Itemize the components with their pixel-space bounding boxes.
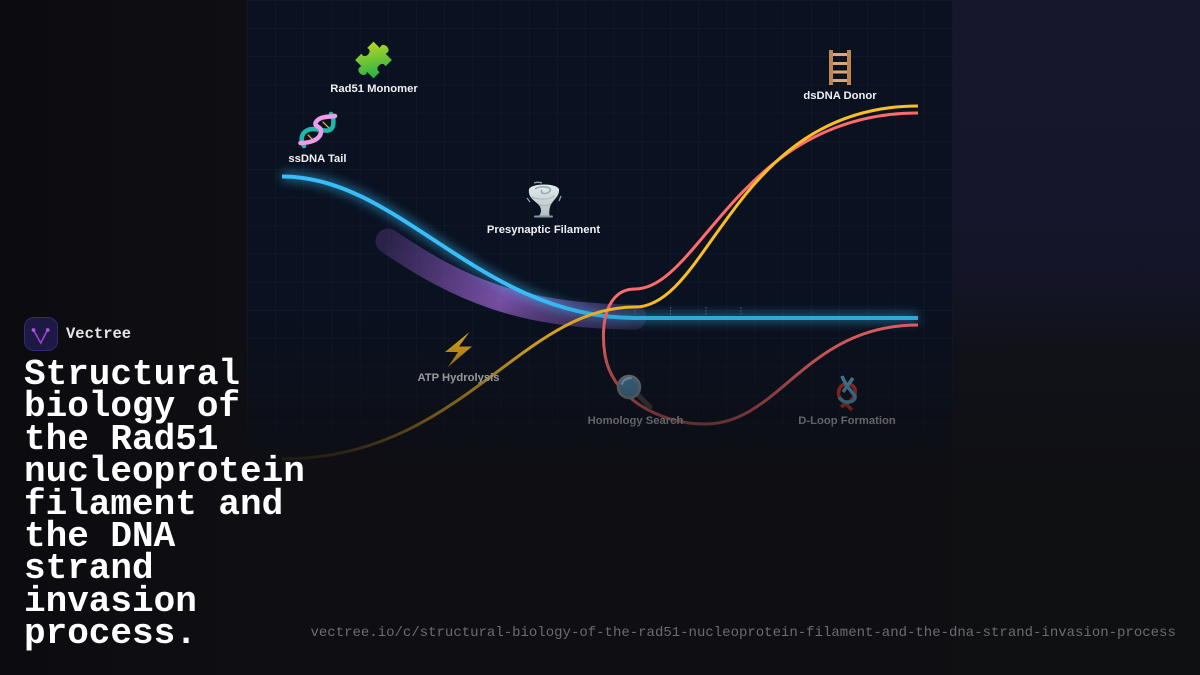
label: ssDNA Tail: ssDNA Tail: [288, 153, 347, 165]
logo badge: [24, 317, 58, 351]
title: Structural: [24, 354, 240, 395]
icon: ladder: [829, 50, 851, 85]
label: Homology Search: Homology Search: [588, 415, 683, 427]
icon: tornado: [527, 182, 561, 217]
icon: DNA helix: [300, 114, 335, 146]
icon: knot: [839, 376, 855, 410]
title: strand: [24, 548, 154, 589]
left panel shade: [0, 0, 247, 675]
yellow curve: invading strand: [282, 106, 918, 459]
tick marks: [635, 307, 741, 316]
label: ATP Hydrolysis: ATP Hydrolysis: [417, 372, 500, 384]
title: the Rad51: [24, 419, 218, 460]
title: invasion: [24, 581, 197, 622]
bottom cover: [247, 470, 953, 675]
title: filament and: [24, 484, 283, 525]
background panel: right navy glow: [953, 0, 1200, 675]
label: Presynaptic Filament: Presynaptic Filament: [487, 224, 600, 236]
red curve: dsDNA donor strand: [603, 113, 918, 424]
chart background: [247, 0, 953, 470]
title: the DNA: [24, 516, 175, 557]
label: D-Loop Formation: D-Loop Formation: [798, 415, 896, 427]
title: nucleoprotein: [24, 451, 305, 492]
label: Rad51 Monomer: Rad51 Monomer: [330, 83, 418, 95]
title: biology of: [24, 386, 240, 427]
title: process.: [24, 613, 197, 654]
icon: puzzle piece: [351, 37, 396, 83]
bottom fade: [247, 300, 953, 470]
icon: magnifying glass: [618, 376, 650, 407]
blue curve: ssDNA: [282, 176, 918, 318]
icon: lightning: [445, 332, 472, 367]
filament band: [388, 241, 634, 317]
chart grid: [247, 0, 953, 470]
url: vectree.io/c/structural-biology-of-the-rad51-nucleoprotein-filament-and-the-dna-strand-invasion-process: [310, 625, 1176, 641]
brand name: Vectree: [66, 325, 131, 343]
label: dsDNA Donor: dsDNA Donor: [803, 90, 877, 102]
title: [24, 354, 305, 654]
blue curve glow: [282, 176, 918, 318]
